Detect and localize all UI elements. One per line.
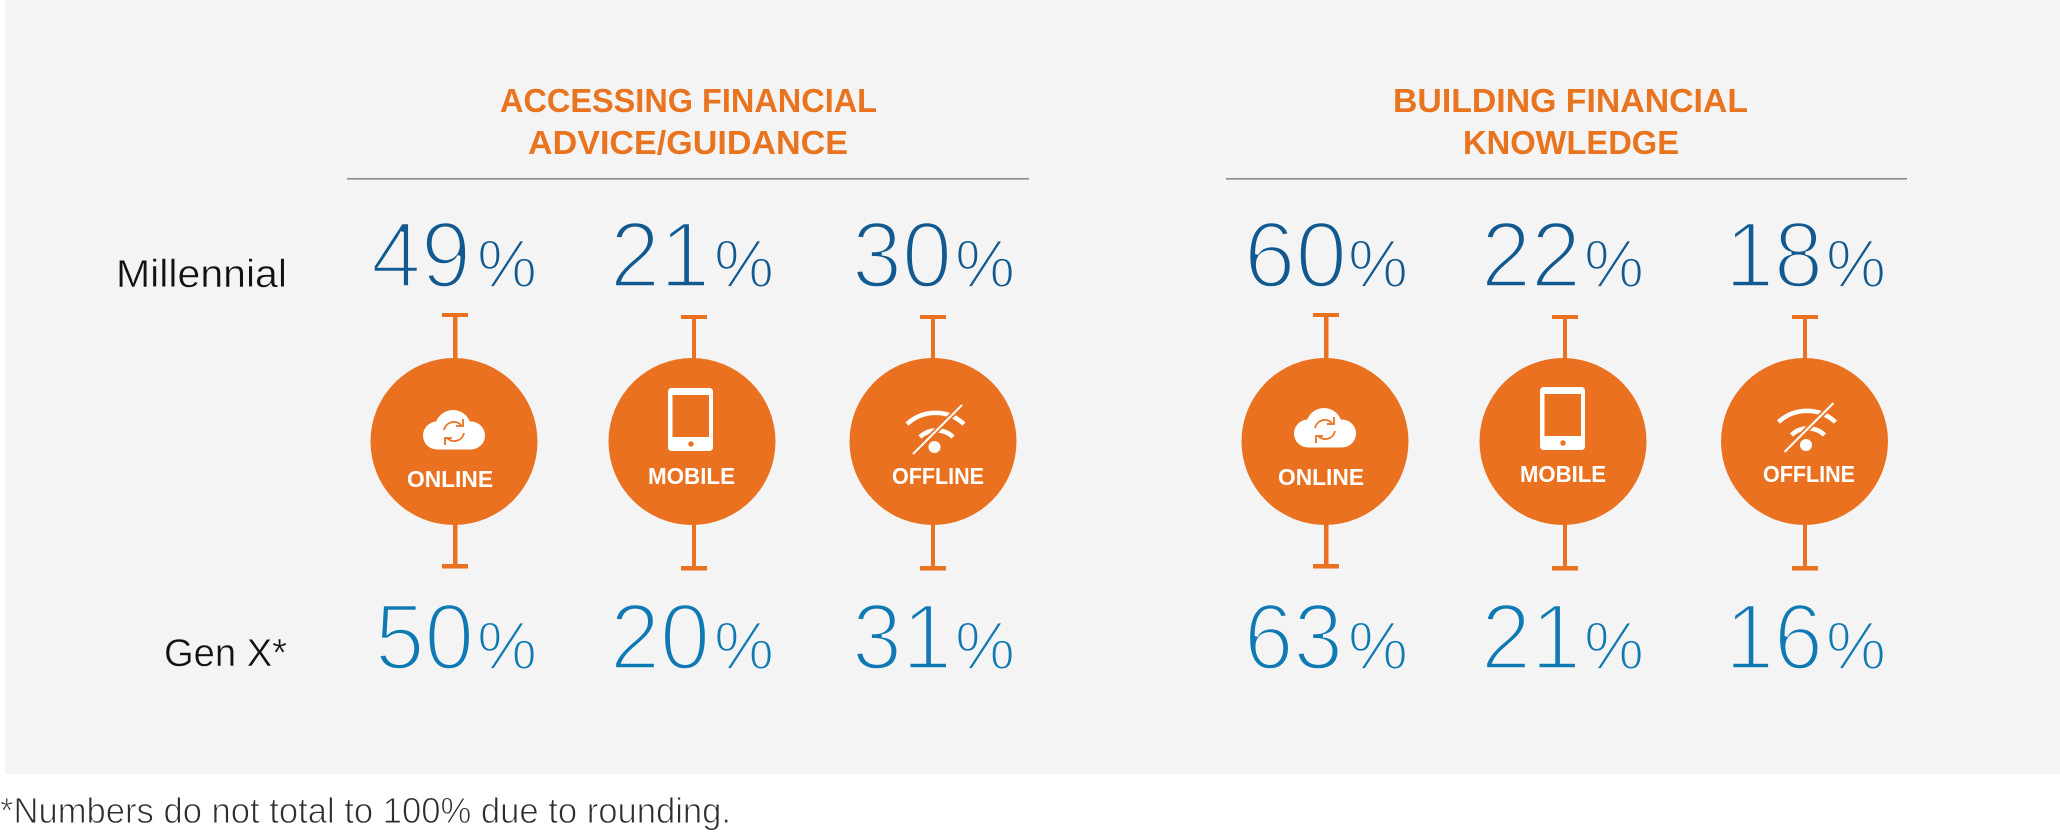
value: Millennial mobile knowledge 22%: 22 xyxy=(1481,202,1581,307)
icon: wifi off xyxy=(1778,403,1836,452)
value: Gen X mobile advice 20%: % xyxy=(714,608,774,684)
connector: mobile advice xyxy=(681,315,707,570)
row label: Gen X: Gen X* xyxy=(164,632,287,675)
badge: mobile knowledge xyxy=(1480,358,1646,525)
badge: offline knowledge xyxy=(1721,358,1888,525)
heading: building financial knowledge: BUILDING FINANCIAL xyxy=(1393,83,1748,120)
value: Millennial online advice 49% xyxy=(371,202,537,307)
value: Gen X online knowledge 63% xyxy=(1244,584,1408,689)
value: Millennial online knowledge 60%: % xyxy=(1348,226,1408,302)
value: Gen X online knowledge 63%: % xyxy=(1348,608,1408,684)
label: offline: OFFLINE xyxy=(892,463,984,489)
value: Gen X offline advice 31% xyxy=(852,584,1015,689)
value: Millennial mobile advice 21%: 21 xyxy=(610,202,710,307)
connector: online knowledge xyxy=(1313,313,1339,568)
label: online: ONLINE xyxy=(1278,464,1364,490)
value: Millennial mobile knowledge 22% xyxy=(1481,202,1644,307)
icon: cloud sync xyxy=(1294,408,1356,448)
value: Gen X mobile advice 20%: 20 xyxy=(610,584,710,689)
value: Millennial mobile advice 21% xyxy=(610,202,774,307)
value: Millennial mobile knowledge 22%: % xyxy=(1584,226,1644,302)
icon: tablet xyxy=(668,388,713,451)
heading: accessing financial advice/guidance: ADVICE/GUIDANCE xyxy=(528,125,848,162)
badge: offline advice xyxy=(850,358,1016,525)
badge: online advice xyxy=(370,358,538,525)
value: Millennial offline advice 30%: 30 xyxy=(852,202,952,307)
heading: accessing financial advice/guidance: ACCESSING FINANCIAL xyxy=(500,83,877,120)
value: Gen X online knowledge 63%: 63 xyxy=(1244,584,1343,689)
connector: offline knowledge xyxy=(1792,315,1818,570)
footnote: *Numbers do not total to 100% due to rounding. xyxy=(0,790,731,831)
value: Gen X mobile advice 20% xyxy=(610,584,774,689)
value: Millennial online advice 49%: 49 xyxy=(371,202,471,307)
value: Millennial offline knowledge 18%: 18 xyxy=(1725,202,1823,307)
value: Millennial mobile advice 21%: % xyxy=(714,226,774,302)
value: Gen X offline knowledge 16% xyxy=(1725,584,1886,689)
value: Gen X offline advice 31%: 31 xyxy=(852,584,952,689)
label: online: ONLINE xyxy=(407,466,493,492)
value: Millennial offline knowledge 18% xyxy=(1725,202,1886,307)
value: Gen X offline knowledge 16%: % xyxy=(1826,608,1886,684)
value: Gen X offline advice 31%: % xyxy=(955,608,1015,684)
connector: mobile knowledge xyxy=(1552,315,1578,570)
heading: accessing financial advice/guidance xyxy=(500,83,877,162)
value: Millennial online knowledge 60%: 60 xyxy=(1244,202,1347,307)
label: offline: OFFLINE xyxy=(1763,461,1855,487)
value: Millennial offline knowledge 18%: % xyxy=(1826,226,1886,302)
label: mobile: MOBILE xyxy=(1520,461,1606,487)
connector: online advice xyxy=(442,313,468,568)
row label: Millennial: Millennial xyxy=(116,253,287,296)
value: Gen X online advice 50%: % xyxy=(477,608,537,684)
badge: online knowledge xyxy=(1242,358,1408,525)
icon: tablet xyxy=(1540,387,1585,450)
value: Millennial online knowledge 60% xyxy=(1244,202,1408,307)
value: Gen X online advice 50% xyxy=(375,584,537,689)
badge: mobile advice xyxy=(608,358,776,525)
icon: cloud sync xyxy=(423,410,485,450)
heading: building financial knowledge: KNOWLEDGE xyxy=(1463,125,1679,162)
connector: offline advice xyxy=(920,315,946,570)
value: Gen X offline knowledge 16%: 16 xyxy=(1725,584,1823,689)
value: Gen X mobile knowledge 21%: % xyxy=(1584,608,1644,684)
label: mobile: MOBILE xyxy=(648,463,735,489)
value: Gen X mobile knowledge 21%: 21 xyxy=(1481,584,1581,689)
icon: wifi off xyxy=(907,405,964,454)
value: Gen X online advice 50%: 50 xyxy=(375,584,474,689)
value: Millennial offline advice 30%: % xyxy=(955,226,1015,302)
value: Gen X mobile knowledge 21% xyxy=(1481,584,1644,689)
value: Millennial online advice 49%: % xyxy=(477,226,537,302)
heading: building financial knowledge xyxy=(1393,83,1748,162)
value: Millennial offline advice 30% xyxy=(852,202,1015,307)
